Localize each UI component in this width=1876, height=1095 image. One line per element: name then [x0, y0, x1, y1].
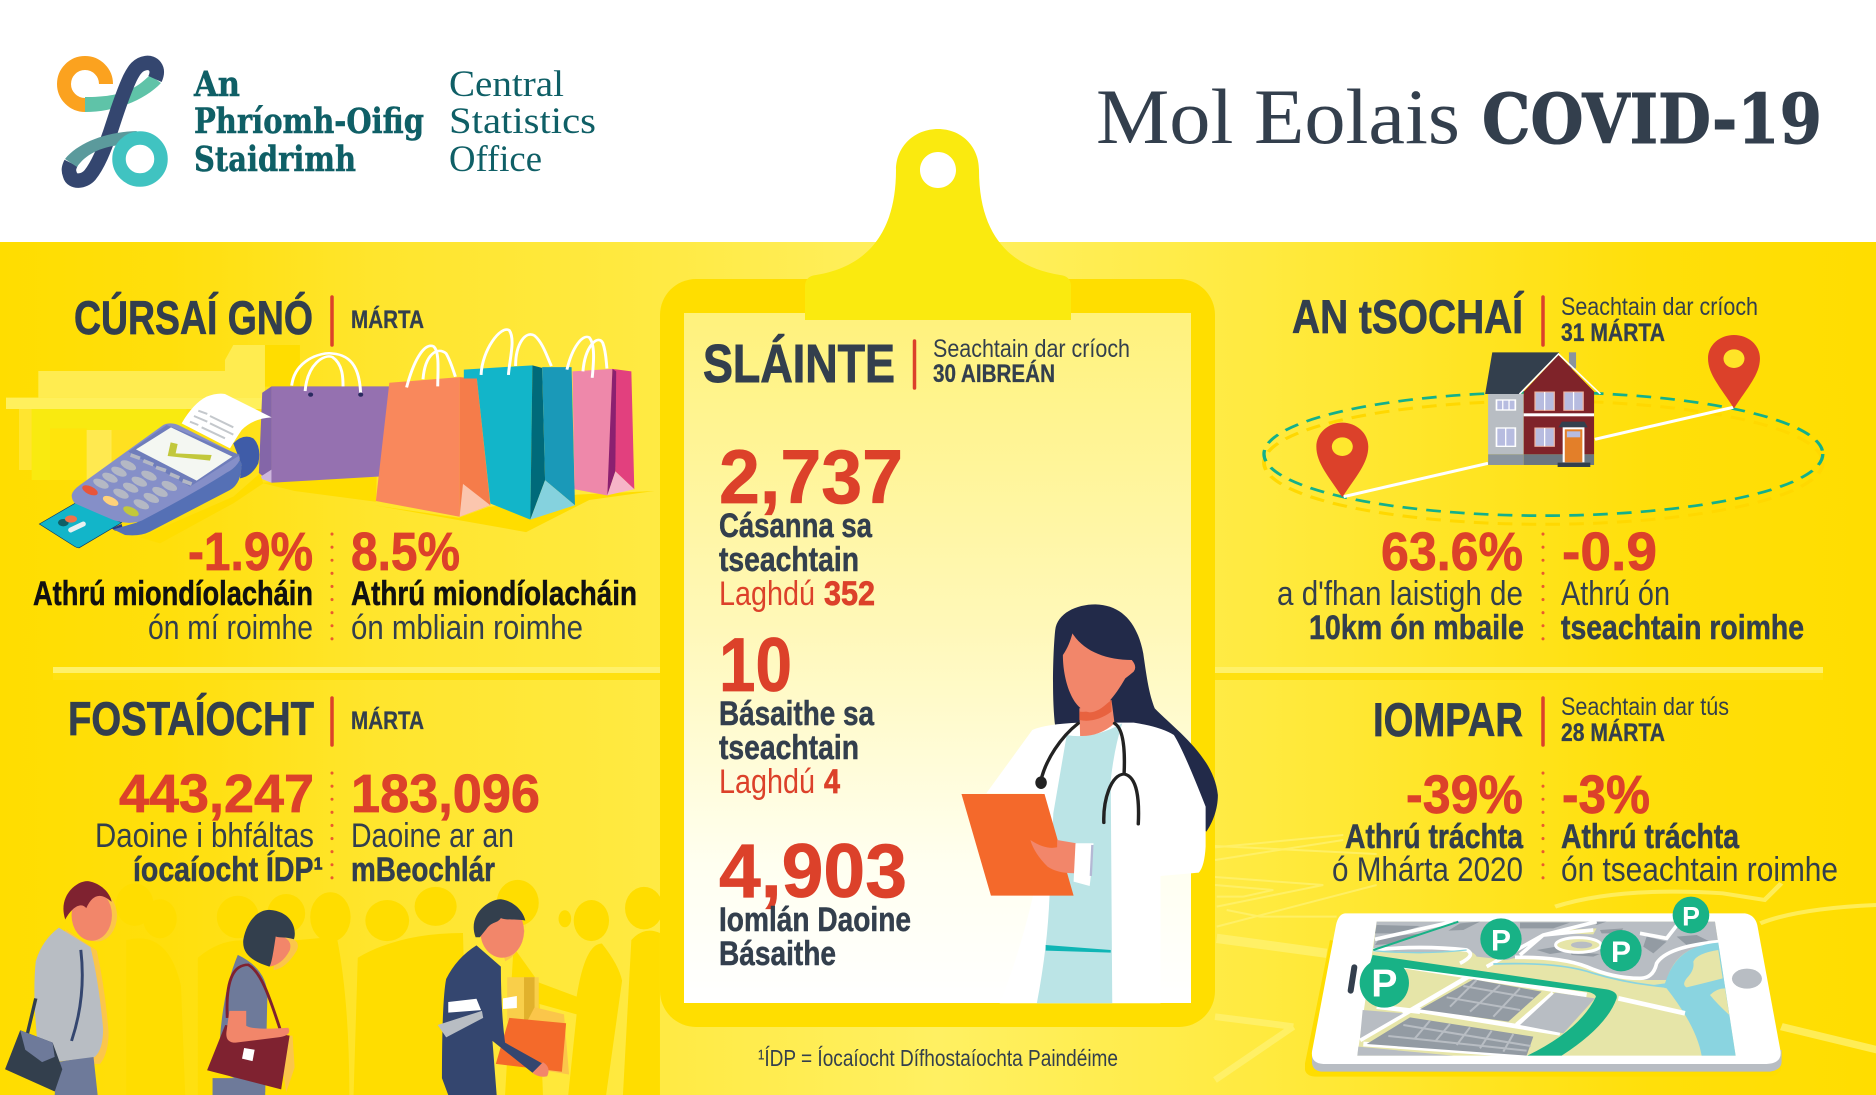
- clipboard board: [660, 279, 1215, 1027]
- stat: -1.9%: -1.9%: [188, 522, 313, 582]
- house: [1485, 352, 1600, 467]
- stat: -39%: Athrú tráchta: [1345, 818, 1524, 856]
- date: 30 aibreán: Seachtain dar críoch: [933, 335, 1130, 363]
- icon: parking pin 1: [1360, 958, 1409, 1008]
- stat: 8.5%: Athrú miondíolacháin: [351, 575, 637, 613]
- background: map lines left of phone: [1210, 835, 1377, 1080]
- illustration: woman with handbag: [207, 910, 298, 1095]
- logo text: English: [449, 64, 596, 180]
- illustration: phone with map: [1305, 897, 1782, 1077]
- stat: 443,247: Daoine i bhfáltas: [95, 817, 314, 855]
- stat: cases: [719, 435, 903, 613]
- body top: [72, 423, 240, 523]
- stat: total deaths: Básaithe: [719, 935, 836, 973]
- stat: cases: Cásanna sa: [719, 507, 873, 545]
- stat: total deaths: 4,903: [719, 829, 907, 914]
- title: [1096, 73, 1822, 160]
- stat: -3%: [1561, 765, 1838, 889]
- stat: 183,096: [351, 764, 540, 889]
- panel: sláinte: [703, 334, 1130, 973]
- stat: 183,096: mBeochlár: [351, 851, 495, 889]
- icon: right map pin: [1708, 335, 1760, 408]
- stethoscope: [1041, 723, 1139, 824]
- illustration: travel radius: [1264, 335, 1823, 524]
- icon: parking pin 3: P: [1611, 936, 1631, 969]
- heading: sláinte: SLÁINTE: [703, 334, 895, 394]
- phone shadow: [1305, 940, 1782, 1077]
- stat: cases: 2,737: [719, 435, 903, 520]
- stat: 63.6%: 63.6%: [1381, 522, 1523, 582]
- heading: iompar: IOMPAR: [1373, 693, 1523, 746]
- stat: deaths: [719, 623, 875, 801]
- map urban area: [1373, 922, 1718, 980]
- coat: [986, 723, 1206, 1003]
- divider left: [53, 667, 663, 680]
- hair: [1053, 604, 1218, 832]
- panel: iompar: [1332, 693, 1838, 889]
- stat: cases: tseachtain: [719, 541, 859, 579]
- stat: -3%: Athrú tráchta: [1561, 818, 1740, 856]
- illustration: card terminal: [39, 394, 272, 548]
- map blocks: [1360, 963, 1685, 1056]
- phone body: [1312, 913, 1782, 1072]
- stat: -0.9: Athrú ón: [1561, 575, 1670, 613]
- bag shadows: [261, 477, 654, 532]
- stat: -0.9: -0.9: [1562, 522, 1657, 582]
- title: COVID-19: [1482, 80, 1822, 160]
- stat: 443,247: [95, 764, 323, 889]
- scrubs: [1037, 723, 1122, 1003]
- logo text: English: Office: [449, 139, 542, 180]
- icon: left map pin: [1316, 423, 1368, 497]
- divider right: [1212, 667, 1823, 680]
- map land: [1357, 922, 1736, 1056]
- stat: -0.9: [1561, 522, 1804, 647]
- stat: 8.5%: ón mbliain roimhe: [351, 609, 583, 647]
- face and neck: [1079, 700, 1115, 736]
- stat: -3%: ón tseachtain roimhe: [1561, 851, 1838, 889]
- heading: an tsochaí: AN tSOCHAÍ: [1292, 290, 1525, 343]
- date: 28 márta: Seachtain dar tús: [1561, 693, 1729, 721]
- logo text: Irish: [193, 64, 424, 180]
- illustration: man with box: [438, 899, 569, 1095]
- teal bag: [464, 330, 575, 520]
- stat: 8.5%: 8.5%: [351, 522, 460, 582]
- date: 30 aibreán: [933, 335, 1130, 388]
- stat: 443,247: íocaíocht ÍDP¹: [133, 851, 323, 889]
- card: [39, 502, 122, 548]
- date: márta: MÁRTA: [351, 706, 424, 735]
- stat: 63.6%: 10km ón mbaile: [1309, 609, 1524, 647]
- stat: cases: Laghdú: [719, 575, 815, 613]
- orange clipboard: [961, 794, 1074, 896]
- footnote: ¹ÍDP = Íocaíocht Dífhostaíochta Paindéime: [758, 1045, 1118, 1071]
- screen: [136, 427, 232, 481]
- phone home button: [1732, 969, 1762, 989]
- pink bag: [567, 337, 634, 496]
- icon: parking pin 3: [1600, 930, 1642, 971]
- screen frame: [128, 425, 240, 487]
- clipboard paper: [684, 313, 1191, 1003]
- icon: parking pin 4: P: [1682, 901, 1700, 931]
- stat: -3%: -3%: [1562, 765, 1650, 825]
- panel: an tsochaí: [1277, 290, 1804, 647]
- heading: cúrsaí gnó: CÚRSAÍ GNÓ: [74, 291, 313, 344]
- logo text: English: Statistics: [449, 101, 596, 142]
- heading: fostaíocht: FOSTAÍOCHT: [68, 692, 314, 745]
- date: 30 aibreán: 30 AIBREÁN: [933, 359, 1055, 388]
- stat: 8.5%: [351, 522, 637, 647]
- stat: -1.9%: ón mí roimhe: [148, 609, 313, 647]
- stat: -39%: ó Mhárta 2020: [1332, 851, 1523, 889]
- stat: deaths: 4: [824, 763, 840, 801]
- white header background: [0, 0, 1876, 242]
- purple bag: [259, 353, 389, 483]
- stat: 443,247: 443,247: [119, 764, 314, 824]
- phone speaker: [1351, 967, 1354, 991]
- stat: -1.9%: [33, 522, 313, 647]
- icon: parking pin 2: P: [1491, 925, 1511, 958]
- hand: [1030, 840, 1076, 873]
- receipt: [182, 394, 272, 448]
- stat: deaths: 10: [719, 623, 792, 708]
- illustration: man with bag: [5, 881, 117, 1095]
- map roads: [1373, 922, 1718, 978]
- date: 31 márta: 31 MÁRTA: [1561, 318, 1665, 347]
- stat: total deaths: Iomlán Daoine: [719, 901, 911, 939]
- radius lines: [1344, 407, 1733, 497]
- illustration: clipboard: [660, 129, 1215, 1027]
- stat: cases: 352: [824, 575, 875, 613]
- orange bag: [376, 346, 490, 517]
- checkmark: [168, 442, 212, 461]
- date: 28 márta: 28 MÁRTA: [1561, 718, 1665, 747]
- stat: -1.9%: Athrú miondíolacháin: [33, 575, 313, 613]
- icon: logo knot: [64, 63, 161, 181]
- illustration: shopping bags: [259, 330, 654, 532]
- stat: deaths: Laghdú: [719, 763, 815, 801]
- stat: -0.9: tseachtain roimhe: [1561, 609, 1804, 647]
- icon: parking pin 1: P: [1371, 962, 1397, 1006]
- stat: 183,096: Daoine ar an: [351, 817, 514, 855]
- stat: 183,096: 183,096: [351, 764, 540, 824]
- roller: [233, 437, 259, 478]
- background: map lines right of phone: [1555, 883, 1876, 1050]
- terminal shadow: [140, 473, 263, 543]
- logo text: English: Central: [449, 64, 564, 105]
- cuff: [1074, 843, 1093, 886]
- logo text: Irish: Staidrimh: [194, 139, 356, 180]
- date: 28 márta: [1561, 693, 1729, 747]
- stat: deaths: tseachtain: [719, 729, 859, 767]
- icon: parking pin 4: [1673, 897, 1709, 933]
- stat: total deaths: [719, 829, 911, 973]
- panel: fostaíocht: [68, 692, 540, 889]
- dashed radius rings: [1264, 401, 1823, 524]
- stat: deaths: Básaithe sa: [719, 695, 875, 733]
- illustration: counter silhouette: [6, 345, 300, 480]
- title: Mol Eolais: [1096, 73, 1460, 160]
- logo text: Irish: Phríomh-Oifig: [194, 101, 424, 142]
- map: [1357, 922, 1736, 1056]
- date: 31 márta: Seachtain dar críoch: [1561, 293, 1758, 321]
- map river: [1653, 943, 1736, 1056]
- panel: cúrsaí gnó: [33, 291, 637, 647]
- date: márta: MÁRTA: [351, 305, 424, 334]
- stat: 63.6%: [1277, 522, 1524, 647]
- yellow background: [0, 242, 1876, 1095]
- logo: Central Statistics Office: [64, 63, 596, 181]
- clipboard clip: [805, 129, 1071, 320]
- keys: [92, 455, 192, 511]
- stat: 63.6%: a d'fhan laistigh de: [1277, 575, 1523, 613]
- map green route: [1370, 955, 1617, 1056]
- icon: parking pin 2: [1480, 918, 1522, 960]
- stat: -39%: [1332, 765, 1524, 889]
- illustration: doctor: [961, 604, 1218, 1003]
- date: 31 márta: [1561, 293, 1758, 347]
- body side: [113, 457, 242, 535]
- stat: -39%: -39%: [1406, 765, 1523, 825]
- logo text: Irish: An: [193, 64, 240, 105]
- illustration: crowd silhouettes: [116, 880, 663, 1095]
